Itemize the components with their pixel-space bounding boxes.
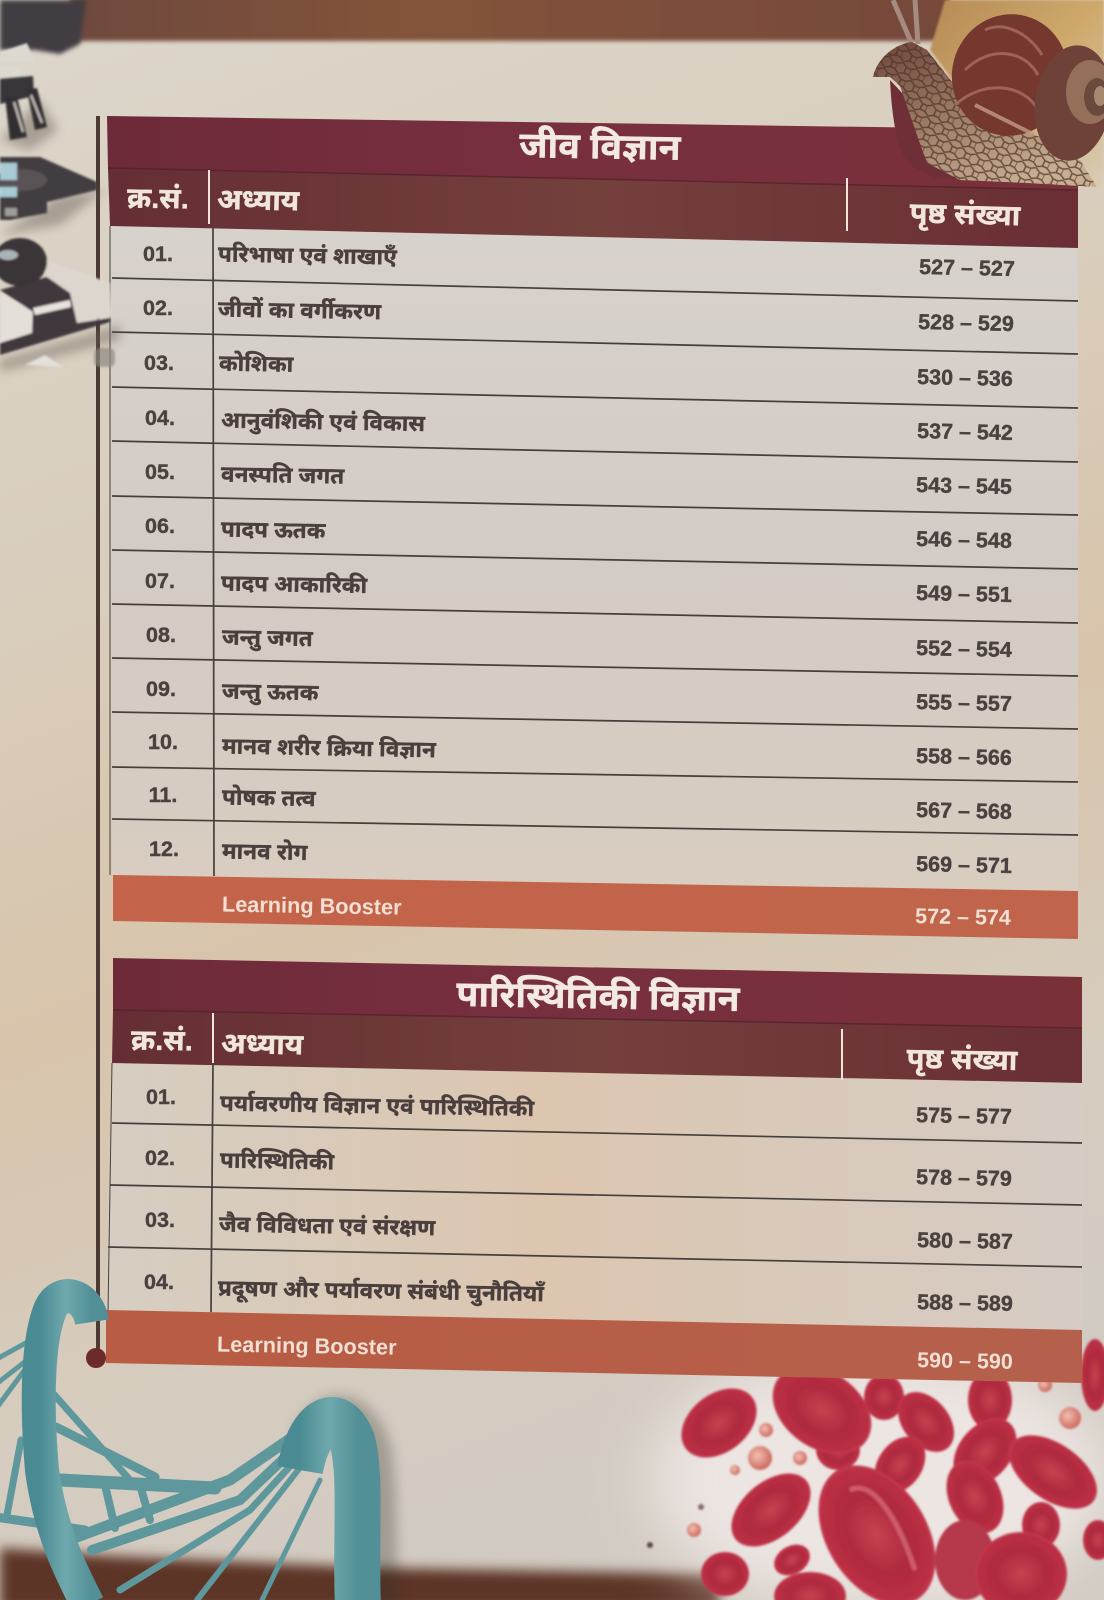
learning booster label: Learning Booster bbox=[222, 892, 402, 920]
arm bbox=[0, 43, 35, 76]
chapter names bbox=[218, 242, 437, 865]
page numbers: 575 – 577 bbox=[916, 1103, 1012, 1129]
serial numbers: 02. bbox=[143, 296, 173, 320]
serial numbers: 01. bbox=[143, 242, 173, 266]
chapter names: जैव विविधता एवं संरक्षण bbox=[219, 1211, 436, 1240]
table rows background bbox=[106, 1063, 1082, 1332]
page numbers: 552 – 554 bbox=[916, 636, 1012, 662]
column headers bbox=[131, 1024, 1018, 1078]
column headers: पृष्ठ संख्या bbox=[909, 198, 1021, 233]
foot mesh bbox=[873, 42, 1097, 187]
serial numbers: 07. bbox=[145, 569, 175, 593]
icon: snail bbox=[873, 0, 1104, 190]
header band bbox=[112, 1010, 1082, 1083]
page numbers bbox=[916, 255, 1015, 878]
page numbers: 569 – 571 bbox=[916, 852, 1012, 878]
serial numbers: 08. bbox=[146, 623, 176, 647]
serial numbers: 04. bbox=[145, 406, 175, 430]
shell main whorl bbox=[938, 1, 1082, 149]
serial numbers: 09. bbox=[146, 677, 176, 701]
page numbers: 567 – 568 bbox=[916, 798, 1012, 824]
panel: जीव विज्ञान table bbox=[107, 116, 1078, 939]
page numbers: 537 – 542 bbox=[917, 419, 1013, 445]
serial numbers: 03. bbox=[144, 351, 174, 375]
objectives bbox=[0, 76, 47, 140]
foot bbox=[873, 42, 1097, 187]
column headers: अध्याय bbox=[221, 1028, 304, 1061]
column headers: क्र.सं. bbox=[127, 182, 189, 216]
learning booster pages: 572 – 574 bbox=[915, 904, 1011, 930]
page numbers: 549 – 551 bbox=[916, 581, 1012, 607]
serial numbers: 10. bbox=[148, 730, 178, 754]
parchment behind snail bbox=[930, 0, 1104, 190]
page numbers: 530 – 536 bbox=[917, 365, 1013, 391]
chapter names: जन्तु जगत bbox=[222, 625, 314, 652]
page numbers: 543 – 545 bbox=[916, 473, 1012, 499]
serial numbers: 04. bbox=[144, 1270, 174, 1294]
serial numbers bbox=[144, 1085, 176, 1294]
chapter names: मानव शरीर क्रिया विज्ञान bbox=[222, 734, 437, 762]
page numbers: 555 – 557 bbox=[916, 690, 1012, 716]
header band bbox=[108, 168, 1078, 248]
column headers: क्र.सं. bbox=[131, 1024, 193, 1058]
table rows background bbox=[110, 226, 1078, 892]
stage bbox=[0, 157, 97, 220]
serial numbers: 05. bbox=[145, 460, 175, 484]
antennae bbox=[893, 0, 911, 42]
bottom brown band bbox=[0, 1548, 720, 1600]
shell outer whorl bbox=[1027, 40, 1104, 166]
serial numbers: 11. bbox=[149, 783, 177, 807]
page numbers: 558 – 566 bbox=[916, 744, 1012, 770]
chapter names: पादप आकारिकी bbox=[221, 570, 368, 598]
chapter names bbox=[218, 1090, 546, 1308]
page numbers: 580 – 587 bbox=[917, 1228, 1013, 1254]
serial numbers: 01. bbox=[146, 1085, 176, 1109]
maroon underside bbox=[890, 80, 980, 180]
serial numbers: 02. bbox=[145, 1146, 175, 1170]
chapter names: जन्तु ऊतक bbox=[222, 679, 320, 706]
chapter names: प्रदूषण और पर्यावरण संबंधी चुनौतियाँ bbox=[218, 1275, 546, 1308]
chapter names: पर्यावरणीय विज्ञान एवं पारिस्थितिकी bbox=[220, 1090, 535, 1121]
icon: red blood cells bbox=[647, 1312, 1104, 1600]
icon: microscope bbox=[0, 0, 120, 372]
vertical left rule bbox=[86, 116, 106, 1368]
chapter names: पादप ऊतक bbox=[221, 517, 327, 543]
chapter names: मानव रोग bbox=[222, 839, 309, 865]
row dividers bbox=[108, 1010, 1082, 1312]
learning booster band bbox=[113, 875, 1078, 939]
page numbers bbox=[916, 1103, 1013, 1316]
chapter names: कोशिका bbox=[219, 351, 294, 377]
page numbers: 588 – 589 bbox=[917, 1290, 1013, 1316]
top brown band bbox=[70, 0, 950, 41]
chapter names: पारिस्थितिकी bbox=[220, 1147, 335, 1174]
learning booster pages: 590 – 590 bbox=[917, 1348, 1013, 1374]
panel: पारिस्थितिकी विज्ञान table bbox=[106, 958, 1082, 1383]
column headers: अध्याय bbox=[217, 184, 300, 217]
title band bbox=[107, 116, 1078, 194]
glow behind blood cells bbox=[650, 1350, 1104, 1600]
learning booster band bbox=[106, 1310, 1082, 1383]
serial numbers bbox=[143, 242, 179, 861]
column headers bbox=[127, 182, 1021, 233]
serial numbers: 06. bbox=[145, 514, 175, 538]
column headers: पृष्ठ संख्या bbox=[906, 1043, 1018, 1078]
chapter names: जीवों का वर्गीकरण bbox=[218, 296, 382, 324]
chapter names: वनस्पति जगत bbox=[221, 462, 345, 489]
icon: DNA helix bbox=[0, 1296, 376, 1600]
learning booster label: Learning Booster bbox=[217, 1332, 397, 1360]
chapter names: आनुवंशिकी एवं विकास bbox=[221, 407, 426, 437]
page numbers: 527 – 527 bbox=[919, 255, 1015, 281]
title band bbox=[113, 958, 1082, 1030]
page numbers: 578 – 579 bbox=[916, 1165, 1012, 1191]
page numbers: 546 – 548 bbox=[916, 527, 1012, 553]
chapter names: परिभाषा एवं शाखाएँ bbox=[218, 242, 397, 270]
row dividers bbox=[108, 168, 1078, 876]
eyepieces bbox=[0, 0, 86, 54]
page numbers: 528 – 529 bbox=[918, 310, 1014, 336]
chapter names: पोषक तत्व bbox=[222, 785, 316, 811]
base bbox=[0, 238, 115, 367]
shadow bbox=[0, 100, 120, 372]
section title: जीव विज्ञान bbox=[519, 124, 682, 168]
serial numbers: 12. bbox=[149, 837, 179, 861]
serial numbers: 03. bbox=[145, 1208, 175, 1232]
section title: पारिस्थितिकी विज्ञान bbox=[456, 973, 741, 1019]
